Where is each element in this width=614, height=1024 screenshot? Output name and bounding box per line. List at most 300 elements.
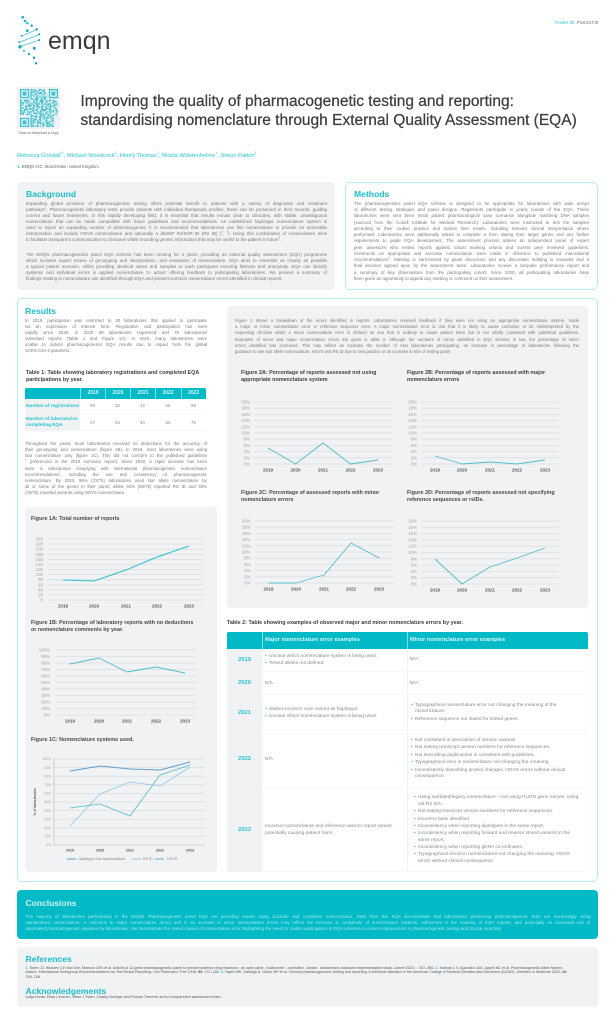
chart: figure 2B line chart: 8% <box>411 437 417 442</box>
table 1 <box>25 388 206 431</box>
table 1 row: completing EQA: 76 <box>191 420 196 424</box>
table 2 row: 2021 <box>227 695 588 731</box>
panel: references and acknowledgements <box>17 947 598 1007</box>
table 2 row: 2023: • <box>414 831 416 836</box>
chart: figure 1A line chart: 160 <box>36 557 44 562</box>
table 2 row: 2023: Inconsistency when reporting gDNA co-ordinates. <box>418 845 523 850</box>
text: methods: recommendations2. Marking is harmonised by panel discussion and any discordant marking is reviewed and a <box>354 257 589 262</box>
table 1 row: registrations: 66 <box>166 403 170 408</box>
chart: figure 1B line chart: 2020 <box>94 719 105 724</box>
table 2 row: 2023: Inconsistency when reporting forward and reverse strand variants in the <box>418 831 570 836</box>
table 2 row: 2019: Unclear which nomenclature system is being used. <box>269 654 377 659</box>
text: results accuracy paragraph: nomenclature. By 2023, 96% (72/75) laboratories used star allele nomenclature for <box>25 478 207 483</box>
logo wordmark: emqn <box>48 27 111 55</box>
chart: figure 2A line chart: 20% <box>241 400 250 404</box>
text: results intro: submitted reports (Table 1 and Figure 1A). In 2020, many laboratories were <box>25 336 207 341</box>
chart: figure 2A line chart: 2021 <box>318 468 329 473</box>
chart: figure 1C multi-line chart: 40% <box>44 809 51 813</box>
QR caption: Scan to download a copy <box>18 131 59 135</box>
chart: figure 1C multi-line chart: 2021 <box>126 848 134 852</box>
chart: figure 1B line chart: 70% <box>41 667 50 672</box>
text: background paragraph 2: a typical patient scenario, whilst providing identical cases and samples to each participant ensuring fairness and anonymity. EQA can identify <box>26 264 327 269</box>
table 2 row: 2021: Unclear which nomenclature system is being used. <box>269 714 377 719</box>
chart: figure 2C line chart: 2020 <box>291 587 302 592</box>
chart: figure 2B line chart <box>408 400 559 473</box>
chart: figure 2D line chart: 4% <box>411 569 417 574</box>
chart: figure 1A line chart: 2022 <box>152 604 163 608</box>
chart: figure 1A line chart: 200 <box>36 547 44 552</box>
text: results intro <box>25 318 207 353</box>
table 2 row: 2019: 2019 <box>238 657 251 663</box>
chart: figure 1A line chart <box>36 536 203 608</box>
chart: figure 1A line chart: 2023 <box>184 604 195 608</box>
chart: figure 1C multi-line chart: 70% <box>44 783 51 787</box>
text: methods: performed. Laboratories were additionally asked to complete a form stating their target genes and any further <box>354 232 589 237</box>
table 2 row: 2019: • <box>265 661 267 666</box>
text: references: clature: International Workgroup Recommendations for Test Result Reporting. Clin Pharmacol Ther 2016; 99: 172–185. 3. Tayeh MK, Gaedigk A, Goetz MP et al. Clinical pharmacogenomic testing and reporting: A technical standard of the American College of Medical Genetics and Genomics (ACMG). Genetics in Medicine 2022; 24: <box>26 970 567 974</box>
table 2 header: Major nomenclature error examples <box>265 637 360 643</box>
chart: figure 2A line chart: 12% <box>241 424 250 429</box>
text: background paragraph 1: nomenclature that can be made compatible with future guidelines and recommendations. An established haplotype nomenclature system is <box>26 219 327 224</box>
chart: figure 2D line chart: 20% <box>408 518 417 524</box>
chart: figure 1A line chart: 80 <box>38 577 44 582</box>
chart: figure 2A line chart: 10% <box>241 430 250 436</box>
chart: figure 2C line chart <box>242 518 393 592</box>
chart: figure 1B line chart: 40% <box>41 686 50 692</box>
chart: figure 2A line chart: 2019 <box>263 468 274 473</box>
text: background paragraph 1: used to report an expanding number of pharmacogenes; it is recommended that laboratories use this nomenclature to provide an actionable <box>26 225 327 230</box>
chart: figure 1A line chart: 40 <box>38 587 44 592</box>
chart: figure 2D line chart: 0% <box>411 582 417 586</box>
figure 2B title: nomenclature errors <box>407 376 459 382</box>
chart: figure 2A line chart: 2% <box>244 455 250 460</box>
table 2 row: 2021: • <box>265 707 267 712</box>
table 1 title: Table 1: Table showing laboratory registrations and completed EQA <box>26 370 199 376</box>
table 2 row: 2019: • <box>265 654 267 659</box>
chart: figure 2C line chart: 12% <box>242 543 251 548</box>
chart: figure 2A line chart: 2023 <box>373 468 384 473</box>
table 2 row: 2022: • <box>411 768 413 773</box>
text: figure 2 introduction: Figure 2 shows a breakdown of the errors identified in reports. Laboratories received feedback if they were not using an appropriate nomenclature system, made <box>235 318 579 323</box>
table 1 row: completing EQA <box>25 414 206 430</box>
chart: figure 2D line chart: 16% <box>408 531 417 536</box>
table 1 header: 2020 <box>112 390 124 396</box>
chart: figure 1A line chart: 0 <box>41 598 44 602</box>
authors: Rebecca Goodall1*, Michael Woodcock1, Henry Thomas1, Nicola Wolstenholme1, Simon Patton1 <box>17 151 256 159</box>
text: background paragraph 1: current and future treatments. In this rapidly developing field, it is essential that results remain clear to clinicians, with stable, unambiguous <box>26 213 327 218</box>
chart: figure 2C line chart: 2023 <box>374 587 385 592</box>
text: background paragraph 1: interpretation and include HGVS nomenclature and optionally a dbSNP RefSNP ID (RS ID) (2, 3). Using this combination of nomenclature aims <box>26 231 327 236</box>
chart: figure 2B line chart: 2020 <box>457 468 468 473</box>
chart: figure 2C line chart: 2022 <box>346 587 357 592</box>
chart: figure 1C multi-line chart: 0% <box>46 843 51 847</box>
text: results intro: In 2019, participation was restricted to 30 laboratories that applied to participate <box>25 318 207 323</box>
table 2 row: 2023: Typographical errors in nomenclature not changing the meaning. HGVS <box>418 852 570 857</box>
chart: figure 1C multi-line chart: 30% <box>44 817 51 821</box>
chart: figure 2A line chart: 8% <box>244 437 250 442</box>
chart: figure 1B line chart: 2022 <box>151 719 162 724</box>
chart: figure 2D line chart: 8% <box>411 556 417 561</box>
heading: results: Results <box>25 306 56 316</box>
chart: figure 2A line chart: 14% <box>241 418 250 423</box>
figure 1C title: Figure 1C: Nomenclature systems used. <box>31 736 134 742</box>
text: methods: of different testing strategies and panel designs. Registrants participate in yearly rounds of the EQA. These <box>354 207 589 212</box>
chart: figure 1B line chart: 80% <box>41 660 50 666</box>
chart: figure 2B line chart: 2022 <box>512 468 523 473</box>
chart: figure 2D line chart: 2% <box>411 575 417 580</box>
text: methods: a summary of key observations from the participating cohort. Since 2020, all participating laboratories have <box>354 270 589 275</box>
table 2 row: 2023: • <box>414 816 416 822</box>
chart: figure 2A line chart <box>241 400 392 473</box>
chart: figure 1C multi-line chart: 2020 <box>96 848 104 852</box>
chart: figure 1C multi-line chart: 10% <box>44 835 51 839</box>
panel: background <box>17 182 335 290</box>
chart: figure 1C multi-line chart: 100% <box>43 757 51 761</box>
chart: figure 1A line chart: 100 <box>36 572 44 577</box>
text: methods: Comments on appropriate and accurate nomenclature were made in reference to published international <box>354 251 589 256</box>
chart: figure 2C line chart: 20% <box>242 518 251 524</box>
figure 2A title: Figure 2A: Percentage of reports assessed not using <box>241 370 376 376</box>
table 1 row: registrations: 30 <box>90 403 95 408</box>
table 1 header: 2022 <box>162 390 174 396</box>
text: methods: laboratories were sent three mock patient pharmacological case scenarios alongside matching DNA samples <box>354 213 589 218</box>
text: conclusions: standardised nomenclature. A reduction in major nomenclature errors and in an increase in minor nomenclature errors may reflect the increase in complexity of nomenclature systems, refinement in the marking of EQA reports, and potentially an increased use of <box>26 920 590 925</box>
icon: emqn logo helix <box>18 16 40 64</box>
chart: figure 2B line chart: 12% <box>408 424 417 429</box>
heading: methods: Methods <box>354 189 389 199</box>
table 2 row: 2022: consequence. <box>415 774 445 779</box>
title <box>80 93 577 129</box>
chart: figure 1C multi-line chart: 50% <box>44 800 51 804</box>
chart: figure 1A line chart: 140 <box>36 562 44 567</box>
text: background paragraph 1: to facilitate transparent communication to clinicians whilst recording genetic information that may be useful to the patient in future3. <box>26 237 281 242</box>
table 1 row: completing EQA: 25 <box>115 420 120 424</box>
chart: figure 2D line chart: 6% <box>411 563 417 568</box>
table 2 row: 2019: N/A <box>410 657 418 662</box>
text: figure 2 introduction: Examples of minor and major nomenclature errors are given in table 2. Although the numbers of errors identified in EQA scheme is low, the percentage of minor <box>235 336 579 342</box>
text: results accuracy paragraph: seen in laboratories complying with international pharmacogenetic nomenclature <box>25 466 207 471</box>
chart: figure 1B line chart: 60% <box>41 674 50 678</box>
table 1 header <box>25 388 206 399</box>
chart: figure 2B line chart: 10% <box>408 430 417 436</box>
table 2 row: 2022: N/A <box>265 757 273 762</box>
chart: figure 1C multi-line chart: HGVS <box>167 857 178 861</box>
table 1 row: completing EQA: 27 <box>90 420 95 424</box>
chart: figure 2C line chart: 0% <box>244 580 251 586</box>
chart: figure 2B line chart: 4% <box>411 449 417 454</box>
text: methods <box>354 201 589 281</box>
table 2 row: 2021: 2021 <box>238 710 251 716</box>
table 2 row: 2022: • <box>411 760 413 765</box>
chart: figure 1A line chart: 220 <box>36 542 44 547</box>
chart: figure 2D line chart: 2022 <box>512 588 523 593</box>
chart: figure 1B line chart: 2019 <box>65 719 76 724</box>
chart: figure 2D line chart: 18% <box>408 525 417 530</box>
chart: figure 1A line chart: 120 <box>36 567 44 572</box>
chart: figure 2D line chart: 2021 <box>485 588 496 593</box>
table 1 header: 2021 <box>137 390 149 396</box>
table 1 row: registrations <box>25 399 206 414</box>
table 2 row: 2023: Incorrect base identified. <box>418 816 470 822</box>
chart: figure 2D line chart <box>408 518 559 593</box>
table 2 row: 2022: • <box>411 738 413 743</box>
text: acknowledgements: Lidija Konta, Erika Cecchin, Jesse J Swen, Charity Nofziger and Roman Tremmel as the independent assessment team. <box>26 995 222 999</box>
figure 1B title: or nomenclature comments by year. <box>31 626 123 632</box>
table 1 row: registrations: 42 <box>140 403 145 408</box>
figure 2C title: Figure 2C: Percentage of assessed reports with minor <box>241 490 379 496</box>
text: methods: according to their routine practice and submit their results, including relevant clinical interpretation where <box>354 226 589 231</box>
figure 2B title <box>407 370 545 382</box>
table 2 row: 2023: • <box>414 824 416 829</box>
text: results accuracy paragraph: (70/75) reported variants using HGVS nomenclature. <box>25 490 125 495</box>
chart: figure 1A line chart: 2020 <box>89 604 100 608</box>
chart: figure 2D line chart: 14% <box>408 537 417 542</box>
table 2 row: 2022: • <box>411 753 413 758</box>
table 1 row: registrations: 35 <box>115 403 120 408</box>
chart: figure 2B line chart: 2019 <box>430 468 441 473</box>
heading: references: References <box>26 954 72 964</box>
chart: figure 2B line chart: 0% <box>411 462 417 466</box>
text: results accuracy paragraph: Throughout the years, most laboratories received no deductions for the accuracy of <box>25 441 207 446</box>
panel: conclusions <box>17 890 598 939</box>
table 2 row: 2023: • <box>414 852 416 857</box>
text: background paragraph 1 <box>26 201 327 242</box>
chart: figure 2B line chart: 2023 <box>540 468 551 473</box>
table 2 row: 2022: Inconsistently describing protein changes. HGVS errors without clinical <box>415 768 565 773</box>
figure 2A title: appropriate nomenclature system <box>241 376 328 382</box>
table 2 row: 2023: same report. <box>418 838 445 842</box>
figure 2D title: reference sequences or rsIDs. <box>407 496 484 502</box>
text: references: 1. Swen JJ, Wouden CH Van Der, Manson LEN et al. Articles A 12-gene pharmacogenetic panel to prevent adverse drug reactions : an open-label , multicentre , controlled , cluster- randomised crossover implementation study. Lancet 2023 ; : 347–356. 2. Kalman L V, Agúndez JAG, Appell ML et al. Pharmacogenetic Allele Nomen- <box>26 966 564 970</box>
chart: figure 1B line chart: 100% <box>39 648 50 652</box>
text: conclusions: The majority of laboratories participating in the EMQN Pharmacogenetic panel EQA are providing results using accurate and consistent nomenclature. Data from this EQA demonstrates that laboratories performing pharmacogenetic tests are increasingly using <box>26 914 590 919</box>
table 2 <box>227 632 588 872</box>
chart: figure 1A line chart: 240 <box>36 536 44 542</box>
table 2 row: 2021: Reference sequence not stated for tested genes. <box>415 717 519 722</box>
chart: figure 1B line chart: 0% <box>44 712 50 718</box>
text: background paragraph 1: Expanding global provision of pharmacogenetic testing offers potential benefit to patients with a variety of diagnoses and treatment <box>26 201 327 206</box>
table 2 header <box>227 632 588 649</box>
figure 1B title <box>31 620 194 632</box>
chart: figure 1A line chart: 2021 <box>121 604 132 608</box>
heading: acknowledgements: Acknowledgements <box>26 986 106 996</box>
table 1 header: 2023 <box>188 390 199 396</box>
table 2 row: 2019 <box>227 649 588 672</box>
chart: figure 2C line chart: 8% <box>244 556 251 561</box>
chart: figure 2B line chart: 6% <box>411 443 417 448</box>
chart: figure 2D line chart: 2023 <box>540 588 551 593</box>
chart: figure 1C multi-line chart: % of laboratories <box>33 788 37 816</box>
table 2 row: 2023: errors without clinical consequence. <box>418 858 494 864</box>
text: results intro: unable to submit pharmacogenetics EQA results due to impact from the global <box>25 342 207 347</box>
text: background paragraph 2: which includes expert review of genotyping and interpretation, and evaluation of nomenclature. EQA aims to resemble as closely as possible <box>26 258 327 263</box>
chart: figure 1C multi-line chart: 2022 <box>156 848 164 852</box>
chart: figure 2D line chart: 10% <box>408 550 417 555</box>
text: references <box>26 966 567 979</box>
chart: figure 2B line chart: 2% <box>411 455 417 460</box>
text: figure 2 introduction <box>235 318 579 354</box>
text: results intro: SARS CoV-2 pandemic. <box>25 348 71 353</box>
chart: figure 1C multi-line chart: RS ID <box>143 857 153 861</box>
table 2 header: Minor nomenclature error examples <box>410 637 505 643</box>
table 2 row: 2022: 2022 <box>238 756 251 762</box>
table 2 row: 2020 <box>227 672 588 695</box>
table 2 row: 2022: Not describing duplications in consistent with guidelines. <box>415 753 534 758</box>
text: results intro: via an expression of interest form. Registration and participation has risen <box>25 324 207 329</box>
table 2 row: 2023: • <box>414 809 416 814</box>
table 1 title: participations by year. <box>26 376 83 382</box>
chart: figure 1C multi-line chart: 90% <box>44 766 51 770</box>
text: methods: peer assessors who review reports against robust marking criteria and current peer reviewed guidelines. <box>354 245 589 250</box>
table 1 row: completing EQA: completing EQA <box>26 422 62 427</box>
title: Improving the quality of pharmacogenetic testing and reporting: <box>80 93 514 110</box>
table 2 title: Table 2: Table showing examples of observed major and minor nomenclature errors by year. <box>227 620 463 626</box>
table 2 row: 2023 <box>227 788 588 872</box>
table 1 row: registrations: Number of registrations <box>26 403 79 408</box>
chart: figure 2A line chart: 0% <box>244 462 250 466</box>
text: methods: The pharmacogenetics panel EQA scheme is designed to be appropriate for laboratories with wide arrays <box>354 201 589 206</box>
chart: figure 2A line chart: 2020 <box>290 468 301 473</box>
figure 1A title: Figure 1A: Total number of reports <box>31 516 120 522</box>
table 2 row: 2022: Not stating transcript version numbers for reference sequences. <box>415 745 550 750</box>
chart: figure 1B line chart: 10% <box>41 706 50 711</box>
table 2 row: 2020: N/A <box>265 680 273 686</box>
table 2 row: 2023: 2023 <box>238 827 251 833</box>
affiliation: 1. EMQN CIC, Manchester, United Kingdom <box>17 164 99 169</box>
table 1 title <box>26 370 200 382</box>
text: methods: final decision agreed upon by the assessment team. Laboratories receive a bespoke performance report and <box>354 263 589 268</box>
figure 2D title: Figure 2D: Percentage of reports assessed not specifying <box>407 490 555 496</box>
chart: figure 1B line chart: 2021 <box>122 719 133 724</box>
chart: figure 1B line chart: 20% <box>41 700 50 704</box>
chart: figure 1C multi-line chart: 2019 <box>66 848 74 852</box>
table 2 row: 2021: • <box>265 714 267 719</box>
chart: figure 2C line chart: 2021 <box>319 587 330 592</box>
table 2 row: 2021: • <box>411 717 413 722</box>
text: background paragraph 2: systemic and individual errors in applied nomenclature 'in action' offering feedback to participating laboratories. We present a summary of <box>26 270 327 275</box>
panel: figure 1 charts <box>25 507 217 872</box>
figure 2A title <box>241 370 376 382</box>
table 2 row: 2023: • <box>414 795 416 800</box>
table 1 row: completing EQA: 60 <box>166 420 170 424</box>
chart: figure 1C multi-line chart <box>33 757 205 861</box>
figure 2C title <box>241 490 380 502</box>
table 1 row: completing EQA: 40 <box>140 420 145 424</box>
table 1 row: completing EQA: Number of laboratories <box>26 416 78 420</box>
chart: figure 1C multi-line chart: Haplotype Star Nomenclature <box>78 857 125 861</box>
chart: figure 2A line chart: 16% <box>241 412 250 417</box>
text: figure 2 introduction: errors identified has increased. This may reflect an increase the number of new laboratories participating, an increase in percentage of laboratories following the <box>235 343 579 348</box>
table 2 row: 2021: nomenclature. <box>415 709 445 714</box>
chart: figure 1A line chart: 20 <box>38 592 44 597</box>
text: background paragraph 1: pathways1. Pharmacogenetic laboratory tests provide patients with individual therapeutic profiles; these can be preserved in their records, guiding <box>26 206 327 212</box>
table 2 row: 2020: 2020 <box>238 680 251 686</box>
panel: results <box>17 298 598 882</box>
text: results accuracy paragraph: their genotyping and nomenclature (figure 1B). In 2019, most laboratories were using <box>25 447 207 452</box>
text: background paragraph 2: findings relating to nomenclature use identified through EQA and present common nomenclature errors identified in clinical reports. <box>26 276 283 281</box>
heading: conclusions: Conclusions <box>26 898 77 908</box>
table 2 row: 2023: potentially causing patient harm. <box>265 830 334 836</box>
panel: methods <box>345 182 598 290</box>
chart: figure 2C line chart: 18% <box>242 525 251 530</box>
table 1 row: registrations: 88 <box>191 403 196 408</box>
table 2 row: 2023: Not stating transcript version numbers for reference sequences. <box>418 809 553 814</box>
text: results accuracy paragraph: all or some of the genes in their panel, whilst 92% (69/75) reported RS ID and 93% <box>25 484 207 489</box>
chart: figure 2C line chart: 10% <box>242 550 251 554</box>
text: results accuracy paragraph <box>25 441 207 495</box>
table 2 row: 2019: Tested alleles not defined. <box>269 661 324 666</box>
text: methods: requirements to guide EQA development. The assessment process utilises an independent panel of expert <box>354 238 589 243</box>
chart: figure 2C line chart: 14% <box>242 537 251 542</box>
text: methods: been given an opportunity to appeal any marking or comment on their assessment. <box>354 276 513 281</box>
chart: figure 1A line chart: 2019 <box>58 604 69 608</box>
QR code <box>17 87 60 129</box>
table 2 row: 2022: Not consistent in description of intronic variants. <box>415 738 517 743</box>
chart: figure 2A line chart: 18% <box>241 406 250 411</box>
text: results accuracy paragraph: recommendations2, including the use and consistency of pharmacogenetic <box>25 471 207 477</box>
table 2 row: 2023: • <box>414 845 416 850</box>
text: figure 2 introduction: requesting clinician whilst a minor nomenclature error is defined as one that is unlikely to cause patient harm but is not wholly consistent with published guidelines. <box>235 330 579 335</box>
table 2 row: 2023: Incorrect nomenclature and reference used to report variant <box>265 824 392 829</box>
panel: figure 2 charts <box>227 306 588 608</box>
figure 2C title: nomenclature errors <box>241 496 293 502</box>
chart: figure 1B line chart: 2023 <box>180 719 191 724</box>
chart: figure 1B line chart <box>39 648 196 724</box>
figure 2B title: Figure 2B: Percentage of reports assessed with major <box>407 370 545 376</box>
text: background paragraph 2 <box>26 252 327 281</box>
chart: figure 2B line chart: 14% <box>408 418 417 423</box>
chart: figure 2A line chart: 6% <box>244 443 250 448</box>
chart: figure 2A line chart: 4% <box>244 449 250 454</box>
table 2 row: 2021: Typographical nomenclature error not changing the meaning of the <box>415 703 557 708</box>
chart: figure 1C multi-line chart: 2023 <box>186 848 194 852</box>
poster id: Poster ID: P18.017.D <box>555 20 598 24</box>
chart: figure 2B line chart: 20% <box>408 400 417 404</box>
chart: figure 2C line chart: 16% <box>242 531 251 536</box>
chart: figure 1A line chart: 180 <box>36 552 44 557</box>
chart: figure 1B line chart: 50% <box>41 680 50 685</box>
table 2 row: 2022: • <box>411 745 413 750</box>
table 2 row: 2021: Stated incorrect core variant as haplotype. <box>269 707 359 712</box>
text: methods: (sourced from the Coriell Institute for Medical Research). Laboratories were instructed to test the samples <box>354 220 589 225</box>
table 2 row: 2023: Inconsistency when reporting diplotypes in the same report. <box>418 824 544 829</box>
figure 1B title: Figure 1B: Percentage of laboratory reports with no deductions <box>31 620 193 626</box>
chart: figure 1A line chart: 60 <box>38 582 44 587</box>
chart: figure 2D line chart: 12% <box>408 544 417 549</box>
heading: background: Background <box>26 189 76 199</box>
chart: figure 2C line chart: 6% <box>244 562 251 567</box>
text: results accuracy paragraph: 2 (referenced in the 2019 summary report). Since 2020, a rapid increase has been <box>25 459 207 464</box>
table 2 row: 2023: Using outdated/legacy nomenclature – not using HUGO gene names, using <box>418 795 578 800</box>
chart: figure 1C multi-line chart: 20% <box>44 826 51 830</box>
chart: figure 2D line chart: 2020 <box>457 588 468 593</box>
text: results intro: rapidly since 2020; in 2023 88 laboratories registered and 76 laboratories <box>25 330 207 335</box>
text: figure 2 introduction: guidance to use star allele nomenclature, HGVS and RS ID due to new practice or an increase in size of testing panel. <box>235 349 451 354</box>
chart: figure 1C multi-line chart: 80% <box>44 774 51 778</box>
chart: figure 2B line chart: 2021 <box>485 468 496 473</box>
chart: figure 2C line chart: 4% <box>244 568 251 573</box>
text: conclusions: automated pharmacogenetic pipelines by laboratories. We demonstrate the varied causes of nomenclature error highlighting the need for routine participation in EQA schemes to ensure improvement in pharmacogenetic testing and clinical reporting. <box>26 926 502 931</box>
chart: figure 1B line chart: 90% <box>41 654 50 659</box>
chart: figure 2D line chart: 2019 <box>430 588 441 593</box>
text: references: 759–768. <box>26 975 41 979</box>
table 2 row: 2022 <box>227 731 588 788</box>
chart: figure 2B line chart: 18% <box>408 406 417 411</box>
text: background paragraph 2: The EMQN pharmacogenetics panel EQA scheme has been running for 4 years, providing an external quality assessment (EQA) programme <box>26 252 327 257</box>
chart: figure 2A line chart: 2022 <box>345 468 356 473</box>
text: figure 2 introduction: a major or minor nomenclature error or reference sequence error. A major nomenclature error is one that it is likely to cause confusion or be misinterpreted by the <box>235 324 579 329</box>
chart: figure 2B line chart: 16% <box>408 412 417 417</box>
